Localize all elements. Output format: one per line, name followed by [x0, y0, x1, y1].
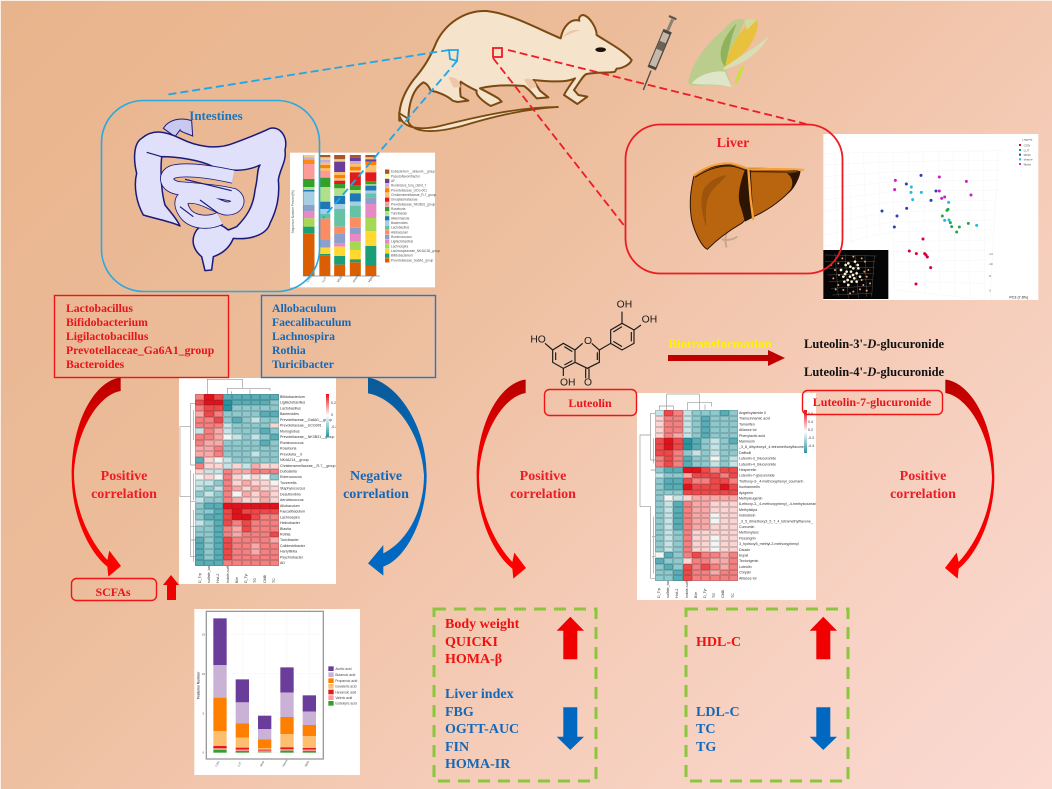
- panel: promoted bacteria list: Ligilactobacillus: [66, 330, 149, 343]
- heatmap: luteolin metabolites vs indicators: Luteolin: [739, 565, 752, 569]
- heatmap: luteolin metabolites vs indicators: Luteolin-4_Glucuronide: [739, 462, 776, 466]
- heatmap: luteolin metabolites vs indicators: CMB: [721, 589, 725, 598]
- label: positive correlation right: correlation: [890, 487, 956, 502]
- heatmap: gut bacteria vs indicators: Faecalibaculum: [280, 510, 305, 514]
- heatmap: gut bacteria vs indicators: TG: [253, 578, 257, 583]
- heatmap: luteolin metabolites vs indicators: Alliance tol: [739, 576, 757, 580]
- heatmap: gut bacteria vs indicators: Bacteroides: [280, 412, 299, 416]
- heatmap: gut bacteria vs indicators: D_Tyr: [244, 573, 248, 583]
- heatmap: gut bacteria vs indicators: 0.2: [331, 401, 336, 405]
- heatmap: gut bacteria vs indicators: Psychrobacter: [280, 555, 304, 559]
- heatmap: luteolin metabolites vs indicators: Luteolin-7-glucuronide: [739, 474, 775, 478]
- heatmap: luteolin metabolites vs indicators: -0.4: [808, 444, 814, 448]
- stacked bar chart: gut microbiota: Christensenellaceae_R-7_group: [391, 193, 437, 197]
- heatmap: gut bacteria vs indicators: Monoglobus: [280, 429, 300, 433]
- intestines callout frame: [102, 100, 320, 292]
- heatmap: luteolin metabolites vs indicators: _3_8_dihydroxy4_4-tetramethoxyflavone_: [738, 445, 807, 449]
- label: positive correlation right: Positive: [900, 469, 946, 484]
- rat: [399, 11, 632, 121]
- stacked bar chart: gut microbiota: Turicibacter: [391, 212, 407, 216]
- stacked bar chart: gut microbiota: Prevotellaceae_UCG-001: [391, 188, 427, 192]
- acid bar chart: Acetic acid: [335, 667, 352, 671]
- heatmap: luteolin metabolites vs indicators: Methylstipa: [739, 508, 757, 512]
- heatmap: luteolin metabolites vs indicators: Fissangrin: [739, 536, 756, 540]
- stacked bar chart: gut microbiota: Ruminiclos_torq_clstrd_7: [391, 184, 427, 188]
- acid bar chart: Hexanoic acid: [335, 690, 356, 694]
- liver icon: [690, 163, 804, 249]
- heatmap: gut bacteria vs indicators: Staphylococcus: [280, 487, 305, 491]
- panel: lipid indicators: TC: [696, 722, 715, 737]
- stacked bar chart: gut microbiota: MOD: [336, 274, 344, 283]
- heatmap: luteolin metabolites vs indicators: 0.4: [808, 420, 813, 424]
- arrow: positive correlation right: [945, 380, 994, 579]
- heatmap: luteolin metabolites vs indicators: D_Tyr: [703, 588, 707, 598]
- heatmap: luteolin metabolites vs indicators: -0.2: [808, 436, 814, 440]
- stacked bar chart: gut microbiota: Lactobacillus: [391, 226, 410, 230]
- luteolin structure: [530, 299, 657, 389]
- stacked bar chart: gut microbiota: Akkermansia: [391, 216, 409, 220]
- heatmap: gut bacteria vs indicators: Bifidobacterium: [280, 395, 305, 399]
- acid bar chart: Valeric acid: [335, 696, 352, 700]
- heatmap: gut bacteria vs indicators: D_Trp: [198, 573, 202, 583]
- stacked bar chart: gut microbiota: Sequence Number Percent(%): [291, 190, 295, 233]
- panel: glycemic indicators: HOMA-IR: [445, 757, 511, 772]
- icon: syringe: [643, 16, 676, 90]
- metabolite labels: Luteolin-4'-D-glucuronide: [804, 365, 945, 379]
- PCA scatter plot: Legend: [1022, 138, 1033, 142]
- heatmap: luteolin metabolites vs indicators: Indole-sulfuric: [685, 575, 689, 598]
- stacked bar chart: gut microbiota: Ureaplasmataceae: [391, 198, 418, 202]
- panel: lipid indicators: [686, 609, 848, 781]
- acid bar chart: 5: [203, 711, 205, 715]
- stacked bar chart: gut microbiota: AF: [391, 179, 395, 183]
- panel: promoted bacteria list: Lactobacillus: [66, 302, 133, 315]
- heatmap: luteolin metabolites vs indicators: 6-ethoxy-3-_4-methoxyphenyl_-4-methylcoumarin: [739, 502, 816, 506]
- liver callout frame: [626, 124, 842, 274]
- acid bar chart: Isovaleric acid: [335, 685, 357, 689]
- heatmap: gut bacteria vs indicators: Enterococcus: [280, 475, 302, 479]
- label: biotransformation: Biotransformation: [668, 336, 772, 351]
- stacked bar chart: gut microbiota: CON: [306, 275, 313, 283]
- panel: glycemic indicators: Liver index: [445, 687, 514, 702]
- panel: reduced bacteria list: Faecalibaculum: [272, 316, 351, 329]
- panel: promoted bacteria list: Prevotellaceae_Ga6A1_group: [66, 344, 215, 357]
- heatmap: gut bacteria vs indicators: [179, 378, 336, 584]
- stacked bar chart: gut microbiota: Bacteroides: [391, 221, 408, 225]
- heatmap: luteolin metabolites vs indicators: Methoxyisoc: [739, 531, 759, 535]
- panel: promoted bacteria list: [54, 296, 228, 378]
- stacked bar chart: gut microbiota: LUT: [321, 276, 328, 283]
- acid bar chart: 0: [203, 751, 205, 755]
- heatmap: luteolin metabolites vs indicators: Tectorigenin: [739, 559, 758, 563]
- heatmap: gut bacteria vs indicators: sulfate_base: [207, 563, 211, 583]
- acid bar chart: LUT: [236, 761, 243, 767]
- heatmap: gut bacteria vs indicators: Helicobacter: [280, 521, 301, 525]
- icon: corn: [688, 19, 768, 87]
- heatmap: luteolin metabolites vs indicators: Alliance tol: [739, 428, 757, 432]
- stacked bar chart: gut microbiota: Ruminococcus: [391, 235, 412, 239]
- callout: luteolin-7-glucuronide: [802, 390, 942, 414]
- heatmap: gut bacteria vs indicators: 0: [331, 413, 333, 417]
- panel: lipid indicators: LDL-C: [696, 705, 740, 720]
- stacked bar chart: gut microbiota: Lachnospiraceae_NK4A136_group: [391, 249, 440, 253]
- heatmap: gut bacteria vs indicators: Ligilactobacillus: [280, 401, 305, 405]
- heatmap: luteolin metabolites vs indicators: Marmesin: [739, 440, 755, 444]
- PCA scatter plot: -8: [988, 274, 991, 278]
- callout: SCFAs: [72, 578, 156, 600]
- panel: promoted bacteria list: Bifidobacterium: [66, 316, 148, 329]
- acid bar chart: Propanoic acid: [335, 679, 357, 683]
- heatmap: luteolin metabolites vs indicators: Transcinnamic acid: [739, 417, 770, 421]
- luteolin structure: OH: [617, 299, 632, 310]
- heatmap: luteolin metabolites vs indicators: Chrysin: [739, 571, 751, 575]
- heatmap: gut bacteria vs indicators: Desulfovibrio: [280, 492, 301, 496]
- callout: luteolin: Luteolin: [568, 396, 612, 410]
- luteolin structure: HO: [530, 335, 546, 346]
- acid bar chart: MOD: [259, 760, 265, 767]
- PCA scatter plot: PC3 (7.8%): [1009, 296, 1029, 300]
- acid bar chart: 15: [202, 633, 205, 637]
- panel: reduced bacteria list: Allobaculum: [272, 302, 337, 315]
- panel: reduced bacteria list: Turicibacter: [272, 358, 334, 371]
- heatmap: gut bacteria vs indicators: Harryflintia: [280, 550, 297, 554]
- heatmap: luteolin metabolites vs indicators: Methyleugenin: [739, 496, 762, 500]
- PCA scatter plot: LUT: [1024, 148, 1029, 152]
- heatmap: luteolin metabolites vs indicators: 0.6: [808, 412, 813, 416]
- arrow: SCFAs up: [163, 575, 179, 600]
- heatmap: gut bacteria vs indicators: AD: [280, 561, 285, 565]
- heatmap: gut bacteria vs indicators: Tuzzerella: [280, 481, 296, 485]
- panel: glycemic indicators: FBG: [445, 705, 474, 720]
- intestines callout frame: Intestines: [189, 108, 243, 123]
- heatmap: luteolin metabolites vs indicators: D_Trp: [657, 588, 661, 598]
- PCA scatter plot: -14: [988, 252, 993, 256]
- stacked bar chart: gut microbiota: Pseudoflavonifractor: [391, 174, 420, 178]
- heatmap: luteolin metabolites vs indicators: Eupal: [739, 554, 748, 558]
- luteolin structure: O: [584, 336, 592, 347]
- heatmap: luteolin metabolites vs indicators: Tamarifen: [739, 422, 755, 426]
- acid bar chart: Isobutyric acid: [335, 702, 357, 706]
- heatmap: luteolin metabolites vs indicators: Hesperetin: [739, 468, 756, 472]
- stacked bar chart: gut microbiota: shame: [352, 273, 360, 283]
- heatmap: gut bacteria vs indicators: Hist-2: [216, 574, 220, 583]
- heatmap: luteolin metabolites vs indicators: Indirubicin: [739, 514, 755, 518]
- stacked bar chart: gut microbiota: Eubacterium__siraeum__group: [391, 170, 435, 174]
- stacked bar chart: gut microbiota: Prevotellaceae_Ga6A1_group: [391, 258, 434, 262]
- luteolin structure: OH: [560, 377, 575, 388]
- panel: lipid indicators: HDL-C: [696, 635, 741, 650]
- acid bar chart: 10: [202, 672, 205, 676]
- heatmap: gut bacteria vs indicators: Prevotellaceae__Ga6A1__group: [280, 418, 332, 422]
- panel: glycemic indicators: [434, 609, 596, 781]
- PCA scatter plot: MOD: [1024, 153, 1031, 157]
- heatmap: luteolin metabolites vs indicators: [637, 393, 816, 600]
- heatmap: luteolin metabolites vs indicators: Bile: [694, 592, 698, 598]
- label: positive correlation left: correlation: [91, 487, 157, 502]
- heatmap: gut bacteria vs indicators: Prevotellaceae__UCG001: [280, 424, 322, 428]
- PCA scatter plot: -2: [988, 289, 991, 293]
- heatmap: gut bacteria vs indicators: Roseburia: [280, 447, 296, 451]
- heatmap: gut bacteria vs indicators: CMB: [263, 574, 267, 583]
- heatmap: gut bacteria vs indicators: Prevotella__9: [280, 452, 302, 456]
- arrow: positive correlation left: [72, 378, 121, 577]
- heatmap: luteolin metabolites vs indicators: Isorhamnetin: [739, 485, 760, 489]
- heatmap: gut bacteria vs indicators: Blautia: [280, 527, 291, 531]
- arrow: positive correlation centre: [477, 380, 526, 579]
- acid bar chart: Features Number: [196, 671, 200, 699]
- stacked bar chart: gut microbiota: Prevotellaceae_NK3B31_group: [391, 202, 435, 206]
- heatmap: luteolin metabolites vs indicators: Angelicylamide II: [739, 411, 766, 415]
- luteolin structure: OH: [642, 314, 657, 325]
- heatmap: gut bacteria vs indicators: Indole-sulfuric: [226, 560, 230, 583]
- PCA scatter plot: shame: [1024, 158, 1033, 162]
- panel: reduced bacteria list: Rothia: [272, 344, 306, 357]
- callout: luteolin-7-glucuronide: Luteolin-7-glucuronide: [813, 395, 932, 409]
- heatmap: luteolin metabolites vs indicators: _3_5_dimethoxy3_5_7_4_tetramethylflavone_: [738, 519, 814, 523]
- heatmap: luteolin metabolites vs indicators: sulfate_base: [666, 578, 670, 598]
- panel: reduced bacteria list: [262, 296, 436, 378]
- panel: glycemic indicators: HOMA-β: [445, 652, 502, 667]
- heatmap: luteolin metabolites vs indicators: Trethoxy-3-_4-methoxyphenyl_coumarin: [739, 479, 803, 483]
- heatmap: gut bacteria vs indicators: Dubosiella: [280, 470, 297, 474]
- panel: glycemic indicators: FIN: [445, 740, 469, 755]
- stacked bar chart: gut microbiota: Mphs: [367, 274, 375, 283]
- heatmap: gut bacteria vs indicators: Aerobiococcus: [280, 498, 304, 502]
- PCA scatter plot: [823, 134, 1038, 300]
- stacked bar chart: gut microbiota: Lachnospira: [391, 244, 408, 248]
- PCA scatter plot: CON: [1024, 143, 1030, 147]
- panel: glycemic indicators: OGTT-AUC: [445, 722, 519, 737]
- panel: glycemic indicators: QUICKI: [445, 635, 498, 650]
- callout: SCFAs: SCFAs: [95, 585, 131, 599]
- label: negative correlation: Negative: [350, 469, 402, 484]
- acid bar chart: [194, 609, 360, 775]
- stacked bar chart: gut microbiota: Roseburia: [391, 207, 406, 211]
- heatmap: gut bacteria vs indicators: Lactobacillus: [280, 406, 301, 410]
- rat tail: [399, 107, 558, 131]
- acid bar chart: Mphs: [303, 759, 310, 767]
- stacked bar chart: gut microbiota: Allobaculum: [391, 230, 409, 234]
- heatmap: gut bacteria vs indicators: Lachnospira: [280, 515, 300, 519]
- heatmap: luteolin metabolites vs indicators: Phenylactic acid: [739, 434, 765, 438]
- heatmap: luteolin metabolites vs indicators: 3_hydroxy5_methyl-2-methoxyphenyl: [739, 542, 799, 546]
- luteolin structure: O: [584, 378, 592, 389]
- label: positive correlation left: Positive: [101, 469, 147, 484]
- acid bar chart: Butanoic acid: [335, 673, 355, 677]
- label: positive correlation centre: correlation: [510, 487, 576, 502]
- heatmap: gut bacteria vs indicators: Rothia: [280, 532, 290, 536]
- callout: luteolin: [544, 390, 636, 416]
- metabolite labels: Luteolin-3'-D-glucuronide: [804, 337, 945, 351]
- heatmap: luteolin metabolites vs indicators: TC: [731, 593, 735, 598]
- heatmap: luteolin metabolites vs indicators: Daffodil: [739, 451, 751, 455]
- metabolite labels: [804, 337, 945, 379]
- heatmap: luteolin metabolites vs indicators: Daucin: [739, 548, 750, 552]
- heatmap: gut bacteria vs indicators: Prevotellaceae__NK3B31__group: [280, 435, 334, 439]
- arrow: biotransformation: [668, 350, 785, 366]
- PCA scatter plot: -10: [988, 262, 993, 266]
- heatmap: gut bacteria vs indicators: NK4A214__group: [280, 458, 309, 462]
- heatmap: gut bacteria vs indicators: Christensenellaceae__R-7__group: [280, 464, 336, 468]
- acid bar chart: CON: [214, 760, 221, 767]
- heatmap: gut bacteria vs indicators: TC: [272, 578, 276, 583]
- heatmap: luteolin metabolites vs indicators: 0.2: [808, 428, 813, 432]
- heatmap: luteolin metabolites vs indicators: Curcumin: [739, 525, 754, 529]
- intestines icon: [135, 119, 286, 271]
- panel: promoted bacteria list: Bacteroides: [66, 358, 125, 371]
- label: negative correlation: correlation: [343, 487, 409, 502]
- panel: lipid indicators: TG: [696, 740, 716, 755]
- liver callout frame: Liver: [717, 136, 749, 151]
- stacked bar chart: gut microbiota: Bifidobacterium: [391, 254, 413, 258]
- label: positive correlation centre: Positive: [520, 469, 566, 484]
- PCA scatter plot: Mphs: [1024, 162, 1031, 166]
- heatmap: gut bacteria vs indicators: Allobaculum: [280, 504, 300, 508]
- heatmap: luteolin metabolites vs indicators: Luteolin-3_Glucuronide: [739, 457, 776, 461]
- stacked bar chart: gut microbiota: [290, 153, 440, 287]
- arrow: negative correlation: [368, 378, 427, 576]
- blue dashed zoom lines: [165, 50, 458, 218]
- panel: glycemic indicators: Body weight: [445, 617, 520, 632]
- heatmap: luteolin metabolites vs indicators: TG: [712, 593, 716, 598]
- heatmap: gut bacteria vs indicators: Turicibacter: [280, 538, 299, 542]
- heatmap: gut bacteria vs indicators: Colidextribacter: [280, 544, 306, 548]
- red dashed zoom lines: [493, 48, 806, 228]
- heatmap: luteolin metabolites vs indicators: Apigenin: [739, 491, 753, 495]
- heatmap: gut bacteria vs indicators: Bile: [235, 577, 239, 583]
- heatmap: luteolin metabolites vs indicators: Hist-2: [675, 589, 679, 598]
- panel: reduced bacteria list: Lachnospira: [272, 330, 335, 343]
- acid bar chart: shame: [281, 758, 289, 767]
- stacked bar chart: gut microbiota: Ligilactobacillus: [391, 240, 414, 244]
- heatmap: gut bacteria vs indicators: Ruminococcus: [280, 441, 304, 445]
